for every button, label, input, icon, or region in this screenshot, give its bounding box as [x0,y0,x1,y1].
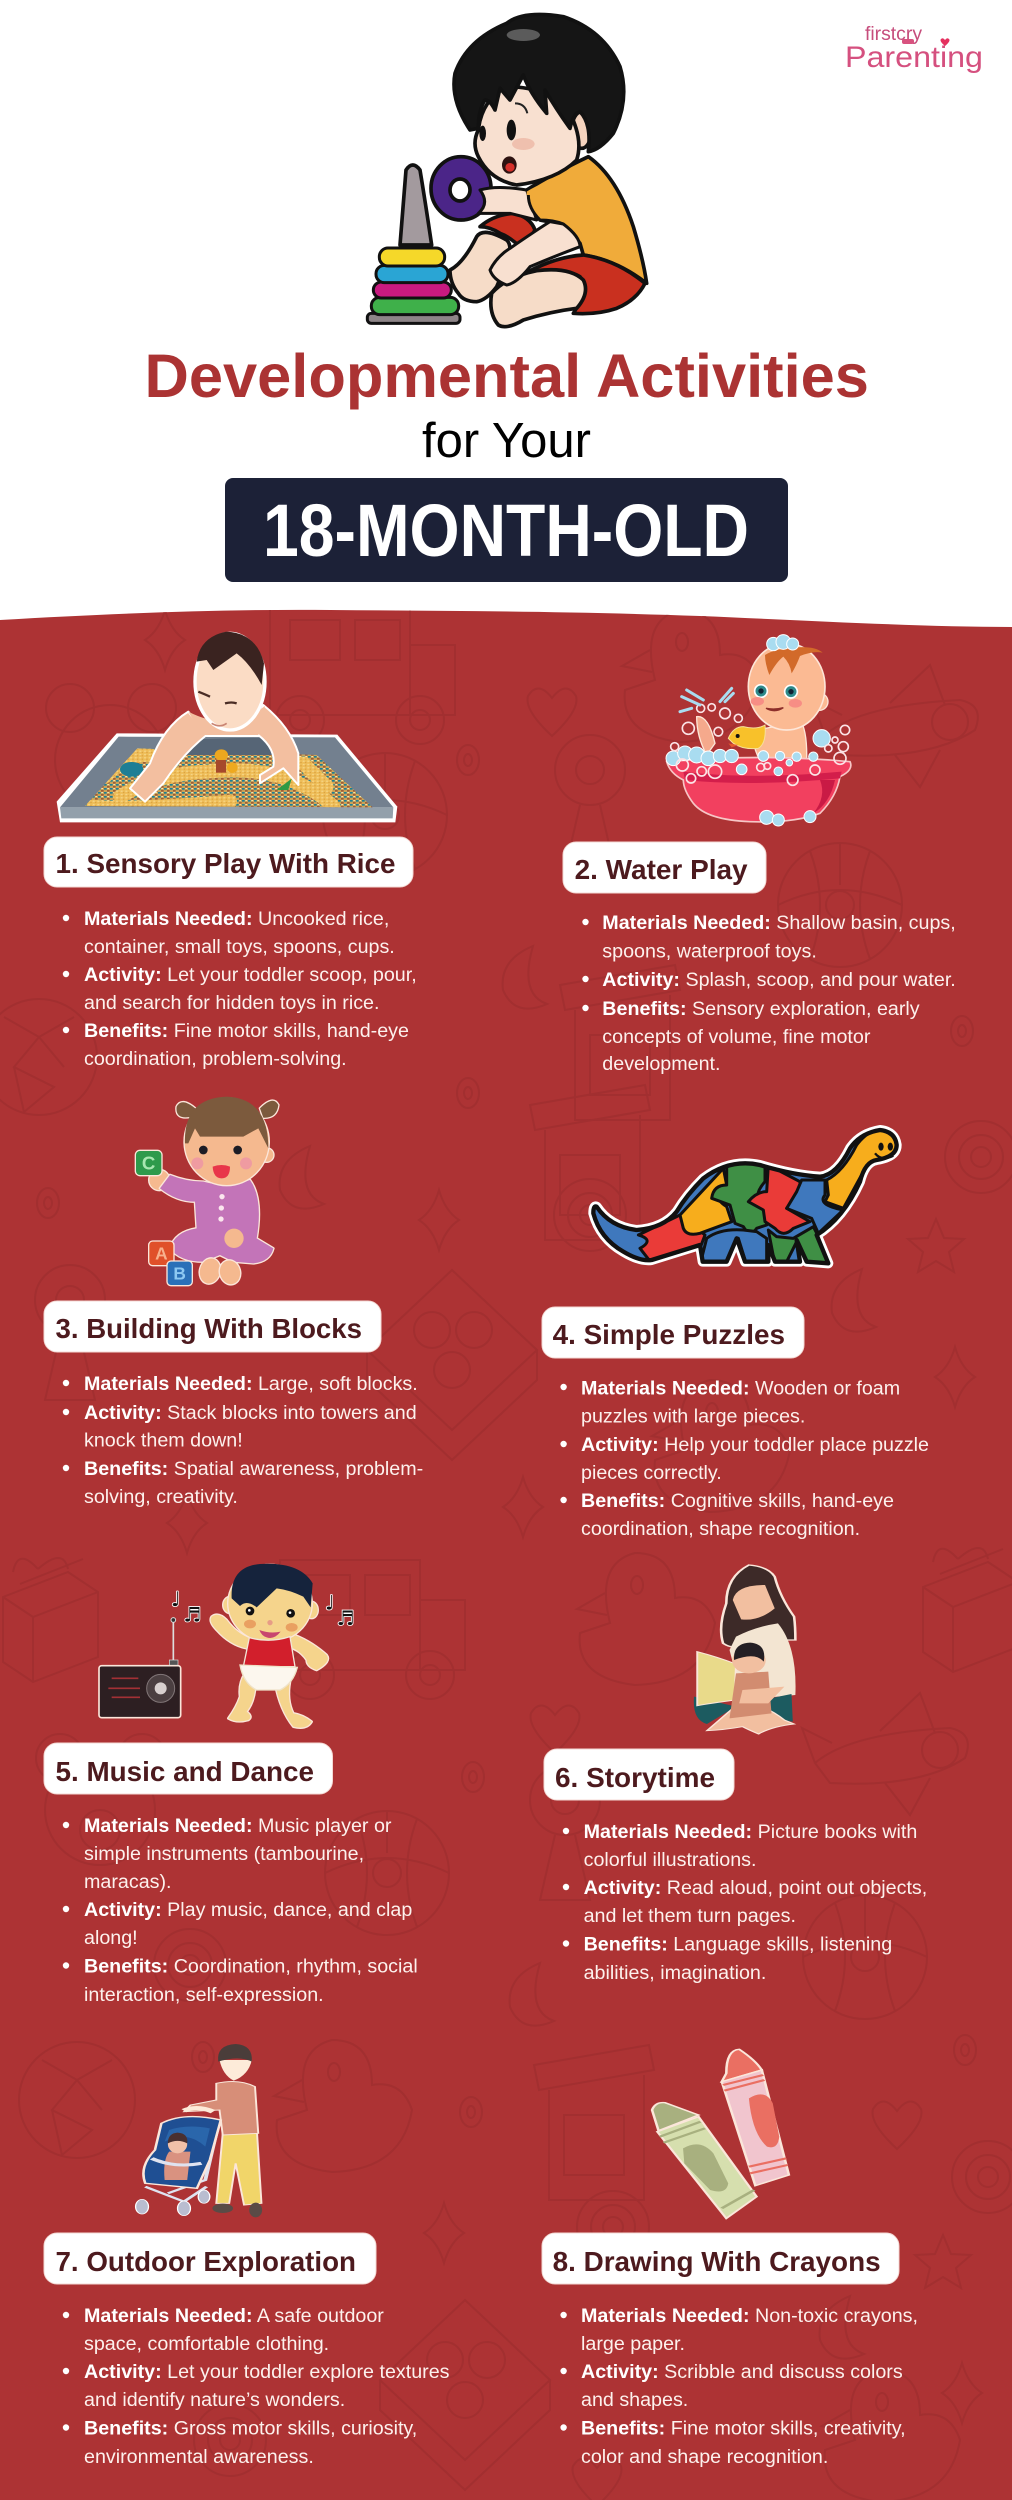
list: music and dance details: interaction, self-expression. [84,1984,324,2006]
panel: red background with wavy top [0,610,1012,2500]
list: storytime details: and let them turn pages. [584,1905,796,1927]
heading: 6 storytime: 6. Storytime [555,1762,715,1793]
list: water play details: Benefits: Sensory exploration, early [602,998,920,1020]
list: music and dance details: Benefits: Coordination, rhythm, social [84,1956,418,1978]
list: music and dance details: along! [84,1927,138,1949]
heading: 7 outdoor exploration [44,2233,376,2284]
list: building blocks details: Benefits: Spatial awareness, problem- [84,1458,423,1480]
heading: 4 simple puzzles: 4. Simple Puzzles [553,1319,785,1350]
list: simple puzzles details: Benefits: Cognitive skills, hand-eye [581,1490,894,1512]
list: sensory play details: Materials Needed: Uncooked rice, [84,908,389,930]
list: water play details: development. [602,1053,721,1075]
subtitle: for Your: for Your [422,414,591,468]
list: drawing with crayons details: Materials Needed: Non-toxic crayons, [581,2305,918,2327]
heading: 2 water play: 2. Water Play [575,854,748,885]
badge: 18-month-old: 18-MONTH-OLD [263,489,749,572]
title: Developmental Activities: Developmental Activities [144,342,869,411]
list: storytime details [563,1821,927,1984]
logo: firstcry parenting [845,24,983,74]
panel: 7 outdoor exploration [44,2044,450,2468]
list: storytime details: abilities, imagination. [584,1962,766,1984]
list: storytime details: colorful illustrations. [584,1849,756,1871]
list: simple puzzles details: Activity: Help your toddler place puzzle [581,1434,929,1456]
illustration: girl with alphabet blocks: B [173,1264,186,1284]
heading: 8 drawing with crayons [542,2233,899,2284]
list: building blocks details: Activity: Stack blocks into towers and [84,1402,417,1424]
list: simple puzzles details: puzzles with large pieces. [581,1406,805,1428]
illustration: mother reading to child [694,1565,796,1734]
list: simple puzzles details: coordination, shape recognition. [581,1518,860,1540]
illustration: girl with alphabet blocks [136,1097,278,1287]
illustration: dancing baby and radio: ♩ [325,1590,334,1614]
list: outdoor exploration details: space, comfortable clothing. [84,2333,329,2355]
list: drawing with crayons details: Benefits: Fine motor skills, creativity, [581,2418,906,2440]
list: music and dance details: simple instruments (tambourine, [84,1843,364,1865]
heading: 5 music and dance [44,1743,332,1794]
panel: 4 simple puzzles [542,1115,929,1540]
list: building blocks details [63,1373,423,1508]
list: building blocks details: knock them down! [84,1430,243,1452]
illustration: jigsaw dinosaur [588,1125,902,1268]
list: simple puzzles details: pieces correctly. [581,1462,722,1484]
illustration: dancing baby and radio: ♬ [183,1603,201,1627]
logo: firstcry parenting: firstcry [865,24,923,45]
list: outdoor exploration details: and identify nature’s wonders. [84,2389,345,2411]
list: sensory play details [63,908,417,1070]
list: outdoor exploration details: Materials Needed: A safe outdoor [84,2305,384,2327]
list: simple puzzles details [560,1378,929,1540]
illustration: baby in bathtub [666,635,851,826]
heading: 3 building with blocks [44,1301,381,1352]
heading: 5 music and dance: 5. Music and Dance [56,1756,314,1787]
heading: 1 sensory play [44,837,413,887]
list: building blocks details: solving, creativity. [84,1486,238,1508]
logo: firstcry parenting: Parenting [845,41,983,74]
list: water play details: spoons, waterproof toys. [602,940,817,962]
heading: 2 water play [563,842,766,893]
illustration: parent pushing stroller [136,2044,262,2217]
list: building blocks details: Materials Needed: Large, soft blocks. [84,1373,418,1395]
list: storytime details: Materials Needed: Picture books with [584,1821,917,1843]
illustration: dancing baby and radio: ♬ [337,1606,355,1630]
list: outdoor exploration details [63,2305,450,2468]
list: music and dance details: maracas). [84,1871,172,1893]
list: drawing with crayons details: large paper. [581,2333,685,2355]
heading: 6 storytime [544,1749,734,1800]
heading: 7 outdoor exploration: 7. Outdoor Exploration [56,2246,356,2277]
illustration: girl with alphabet blocks: A [155,1244,168,1264]
list: water play details: concepts of volume, fine motor [602,1026,871,1048]
panel: 8 drawing with crayons [542,2049,918,2468]
list: sensory play details: coordination, problem-solving. [84,1048,347,1070]
list: drawing with crayons details: Activity: Scribble and discuss colors [581,2361,903,2383]
list: outdoor exploration details: environmental awareness. [84,2446,314,2468]
list: water play details [582,912,956,1075]
list: drawing with crayons details [560,2305,918,2468]
illustration: toddler with stacking rings [367,14,647,327]
list: drawing with crayons details: and shapes. [581,2389,688,2411]
illustration: girl with alphabet blocks: C [142,1153,155,1174]
list: water play details: Activity: Splash, scoop, and pour water. [602,969,956,991]
list: sensory play details: and search for hidden toys in rice. [84,992,379,1014]
illustration: baby in rice tray [57,632,397,822]
illustration: dancing baby and radio: ♩ [171,1587,180,1611]
list: sensory play details: Benefits: Fine motor skills, hand-eye [84,1020,409,1042]
list: outdoor exploration details: Activity: Let your toddler explore textures [84,2361,450,2383]
list: music and dance details: Materials Needed: Music player or [84,1815,392,1837]
list: outdoor exploration details: Benefits: Gross motor skills, curiosity, [84,2418,417,2440]
illustration: two crayons [652,2049,789,2218]
heading: 1 sensory play: 1. Sensory Play With Rice [56,848,396,879]
list: sensory play details: Activity: Let your toddler scoop, pour, [84,964,417,986]
panel: 2 water play [563,635,956,1075]
list: drawing with crayons details: color and shape recognition. [581,2446,828,2468]
panel: 1 sensory play with rice [44,632,417,1070]
header section [144,14,983,582]
list: music and dance details [63,1815,418,2006]
heading: 3 building with blocks: 3. Building With Blocks [56,1313,362,1344]
heading: 8 drawing with crayons: 8. Drawing With Crayons [553,2246,881,2277]
list: storytime details: Activity: Read aloud, point out objects, [584,1877,927,1899]
panel: 3 building with blocks [44,1097,423,1508]
heading: 4 simple puzzles [542,1307,804,1358]
illustration: dancing baby and radio [99,1564,355,1728]
list: water play details: Materials Needed: Shallow basin, cups, [602,912,956,934]
list: sensory play details: container, small toys, spoons, cups. [84,936,395,958]
panel: 6 storytime [544,1565,927,1984]
list: simple puzzles details: Materials Needed: Wooden or foam [581,1378,900,1400]
panel: 5 music and dance [44,1564,418,2006]
list: music and dance details: Activity: Play music, dance, and clap [84,1899,412,1921]
list: storytime details: Benefits: Language skills, listening [584,1934,892,1956]
